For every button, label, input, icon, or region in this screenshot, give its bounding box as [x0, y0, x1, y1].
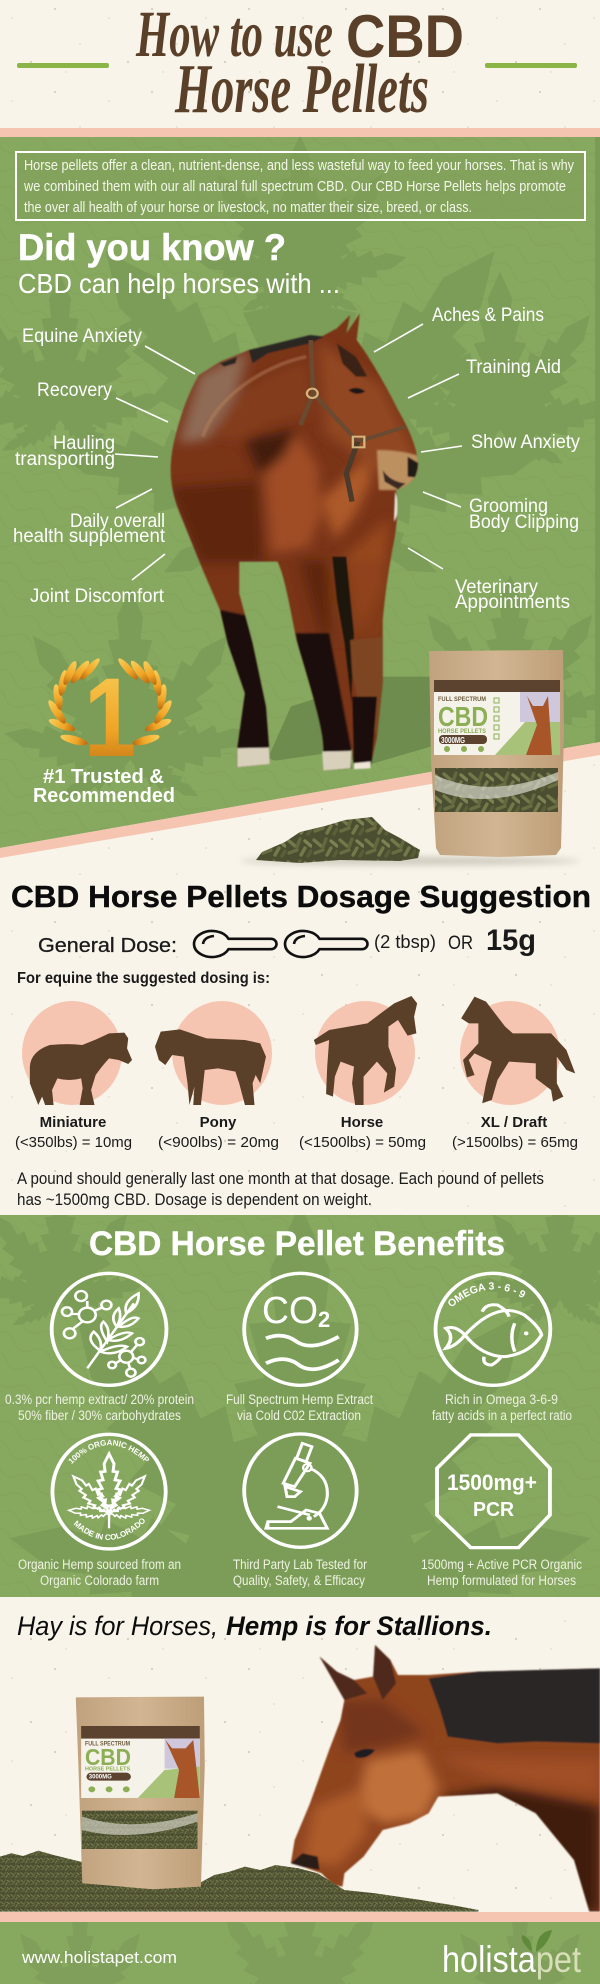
pellet pile	[240, 817, 580, 865]
product bag footer	[76, 1697, 205, 1889]
caption: extraction: via Cold C02 Extraction	[237, 1408, 361, 1423]
label: daily overall health supplement: health supplement	[13, 526, 166, 547]
title: How to use	[135, 0, 333, 71]
label: veterinary appointments	[455, 577, 570, 613]
product bag footer: 3000MG	[89, 1773, 112, 1781]
icon: omega fish	[436, 1273, 550, 1385]
label: pony: (<900lbs) = 20mg	[158, 1134, 279, 1151]
icon: octagon	[437, 1435, 550, 1548]
label: training aid: Training Aid	[466, 357, 561, 378]
title	[135, 0, 464, 128]
label: daily overall health supplement	[13, 511, 166, 547]
dosing intro: For equine the suggested dosing is:	[17, 970, 270, 987]
label: pony: Pony	[200, 1114, 237, 1131]
product bag footer: FULL SPECTRUM	[85, 1741, 130, 1748]
label: xl draft: (>1500lbs) = 65mg	[452, 1134, 578, 1151]
label: xl draft: XL / Draft	[481, 1114, 547, 1131]
caption: composition: 50% fiber / 30% carbohydrates	[18, 1408, 181, 1423]
title accent bars	[17, 63, 577, 68]
label: equine anxiety: Equine Anxiety	[22, 326, 142, 347]
dosage note: A pound should generally last one month at that dosage. Each pound of pellets	[17, 1170, 544, 1188]
horse photo	[161, 310, 429, 777]
award caption: #1 Trusted &	[43, 766, 164, 788]
product bag: CBD	[438, 701, 488, 732]
dosage note: has ~1500mg CBD. Dosage is dependent on weight.	[17, 1191, 372, 1209]
dosage labels	[15, 1114, 578, 1151]
award badge: number one laurel: 1	[84, 655, 136, 780]
tagline	[17, 1611, 492, 1641]
label: recovery: Recovery	[37, 380, 112, 401]
benefit captions	[5, 1392, 582, 1588]
silhouette: miniature	[30, 1033, 132, 1105]
caption: organic	[18, 1557, 181, 1588]
icon text: made in colorado: MADE IN COLORADO	[74, 1518, 145, 1540]
label: veterinary appointments: Appointments	[455, 592, 570, 613]
title: CBD	[346, 3, 464, 70]
caption: pcr	[421, 1557, 582, 1588]
intro text box	[16, 152, 585, 220]
label: veterinary appointments: Veterinary	[455, 577, 538, 598]
general dose row: OR	[448, 933, 473, 954]
label: pony	[158, 1114, 279, 1151]
pink diagonal band	[0, 742, 600, 858]
caption: lab tested: Third Party Lab Tested for	[233, 1557, 367, 1572]
pink circles	[22, 1001, 560, 1105]
benefit icons	[52, 1273, 550, 1549]
label: aches and pains: Aches & Pains	[432, 305, 544, 326]
label: miniature	[15, 1114, 132, 1151]
pellet heap	[0, 1851, 478, 1912]
icon: hemp molecules	[52, 1273, 166, 1385]
caption: pcr: 1500mg + Active PCR Organic	[421, 1557, 582, 1572]
product bag footer: HORSE PELLETS	[85, 1767, 130, 1773]
dosage note	[17, 1170, 544, 1209]
caption: organic: Organic Colorado farm	[40, 1573, 159, 1588]
caption: pcr: Hemp formulated for Horses	[427, 1573, 576, 1588]
pink band top	[0, 128, 600, 137]
caption: omega	[432, 1392, 572, 1423]
caption: omega: Rich in Omega 3-6-9	[445, 1392, 558, 1407]
product bag	[429, 650, 564, 857]
horse silhouettes	[30, 996, 575, 1105]
caption: lab tested: Quality, Safety, & Efficacy	[233, 1573, 365, 1588]
caption: lab tested	[233, 1557, 367, 1588]
title: Horse Pellets	[174, 51, 429, 128]
octagon label: PCR	[473, 1499, 515, 1521]
subheading: CBD can help horses with ...	[18, 268, 340, 299]
footer	[0, 1922, 600, 1984]
label: miniature: Miniature	[40, 1114, 106, 1131]
label: joint discomfort: Joint Discomfort	[30, 586, 165, 607]
general dose row: 15g	[486, 924, 536, 957]
caption: extraction	[226, 1392, 373, 1423]
icon: co2	[244, 1273, 357, 1385]
label: xl draft	[452, 1114, 578, 1151]
label: grooming body clipping: Grooming	[469, 496, 548, 517]
general dose row	[38, 924, 536, 957]
logo: holistapet	[442, 1939, 582, 1980]
icon text: organic hemp: 100% ORGANIC HEMP	[68, 1440, 150, 1464]
caption: extraction: Full Spectrum Hemp Extract	[226, 1392, 373, 1407]
award badge: number one laurel	[46, 655, 174, 780]
website: www.holistapet.com	[21, 1948, 177, 1967]
label: grooming body clipping	[469, 496, 579, 533]
award caption	[33, 766, 175, 807]
panel: benefits	[0, 1215, 600, 1597]
caption: composition: 0.3% pcr hemp extract/ 20% protein	[5, 1392, 194, 1407]
horse head photo	[283, 1640, 600, 1917]
label: horse: Horse	[341, 1114, 383, 1131]
tagline: Hay is for Horses,	[17, 1611, 218, 1641]
caption: omega: fatty acids in a perfect ratio	[432, 1408, 572, 1423]
award caption: Recommended	[33, 785, 175, 807]
heading: dosage: CBD Horse Pellets Dosage Suggestion	[11, 879, 591, 914]
icon: microscope	[244, 1434, 357, 1547]
silhouette: xl draft	[461, 997, 575, 1103]
icon: organic hemp leaf	[52, 1434, 166, 1549]
icon text: co2: CO	[262, 1290, 318, 1332]
label: miniature: (<350lbs) = 10mg	[15, 1134, 132, 1151]
icon: spoon	[194, 931, 276, 957]
label: horse	[299, 1114, 426, 1151]
general dose row: General Dose:	[38, 935, 177, 957]
icon text: co2: 2	[318, 1307, 330, 1332]
general dose row: (2 tbsp)	[374, 932, 436, 952]
caption: organic: Organic Hemp sourced from an	[18, 1557, 181, 1572]
label: hauling transporting: transporting	[15, 449, 115, 470]
octagon label	[447, 1470, 537, 1521]
horse ground shadow	[268, 677, 431, 764]
icon: spoon	[285, 931, 368, 957]
intro text box: the over all health of your horse or livestock, no matter their size, breed, or class.	[24, 200, 472, 216]
icon text: omega: OMEGA 3 - 6 - 9	[448, 1282, 526, 1306]
pink band bottom	[0, 1912, 600, 1922]
panel: did you know	[0, 135, 600, 848]
label: daily overall health supplement: Daily overall	[70, 511, 165, 532]
tagline: Hemp is for Stallions.	[226, 1611, 492, 1641]
product bag: 3000MG	[441, 736, 465, 745]
product bag footer: CBD	[85, 1745, 131, 1771]
heading: benefits: CBD Horse Pellet Benefits	[89, 1225, 505, 1263]
label: hauling transporting	[15, 433, 115, 470]
silhouette: pony	[155, 1029, 266, 1105]
label: show anxiety: Show Anxiety	[471, 432, 580, 453]
octagon label: 1500mg+	[447, 1470, 537, 1495]
caption: composition	[5, 1392, 194, 1423]
callout labels	[13, 305, 580, 613]
product bag: HORSE PELLETS	[438, 729, 486, 735]
label: hauling transporting: Hauling	[53, 433, 115, 454]
silhouette: horse	[314, 996, 417, 1105]
label: grooming body clipping: Body Clipping	[469, 512, 579, 533]
product bag: FULL SPECTRUM	[438, 696, 486, 703]
heading: did you know: Did you know ?	[18, 227, 286, 268]
label: horse: (<1500lbs) = 50mg	[299, 1134, 426, 1151]
callout lines	[115, 324, 462, 580]
